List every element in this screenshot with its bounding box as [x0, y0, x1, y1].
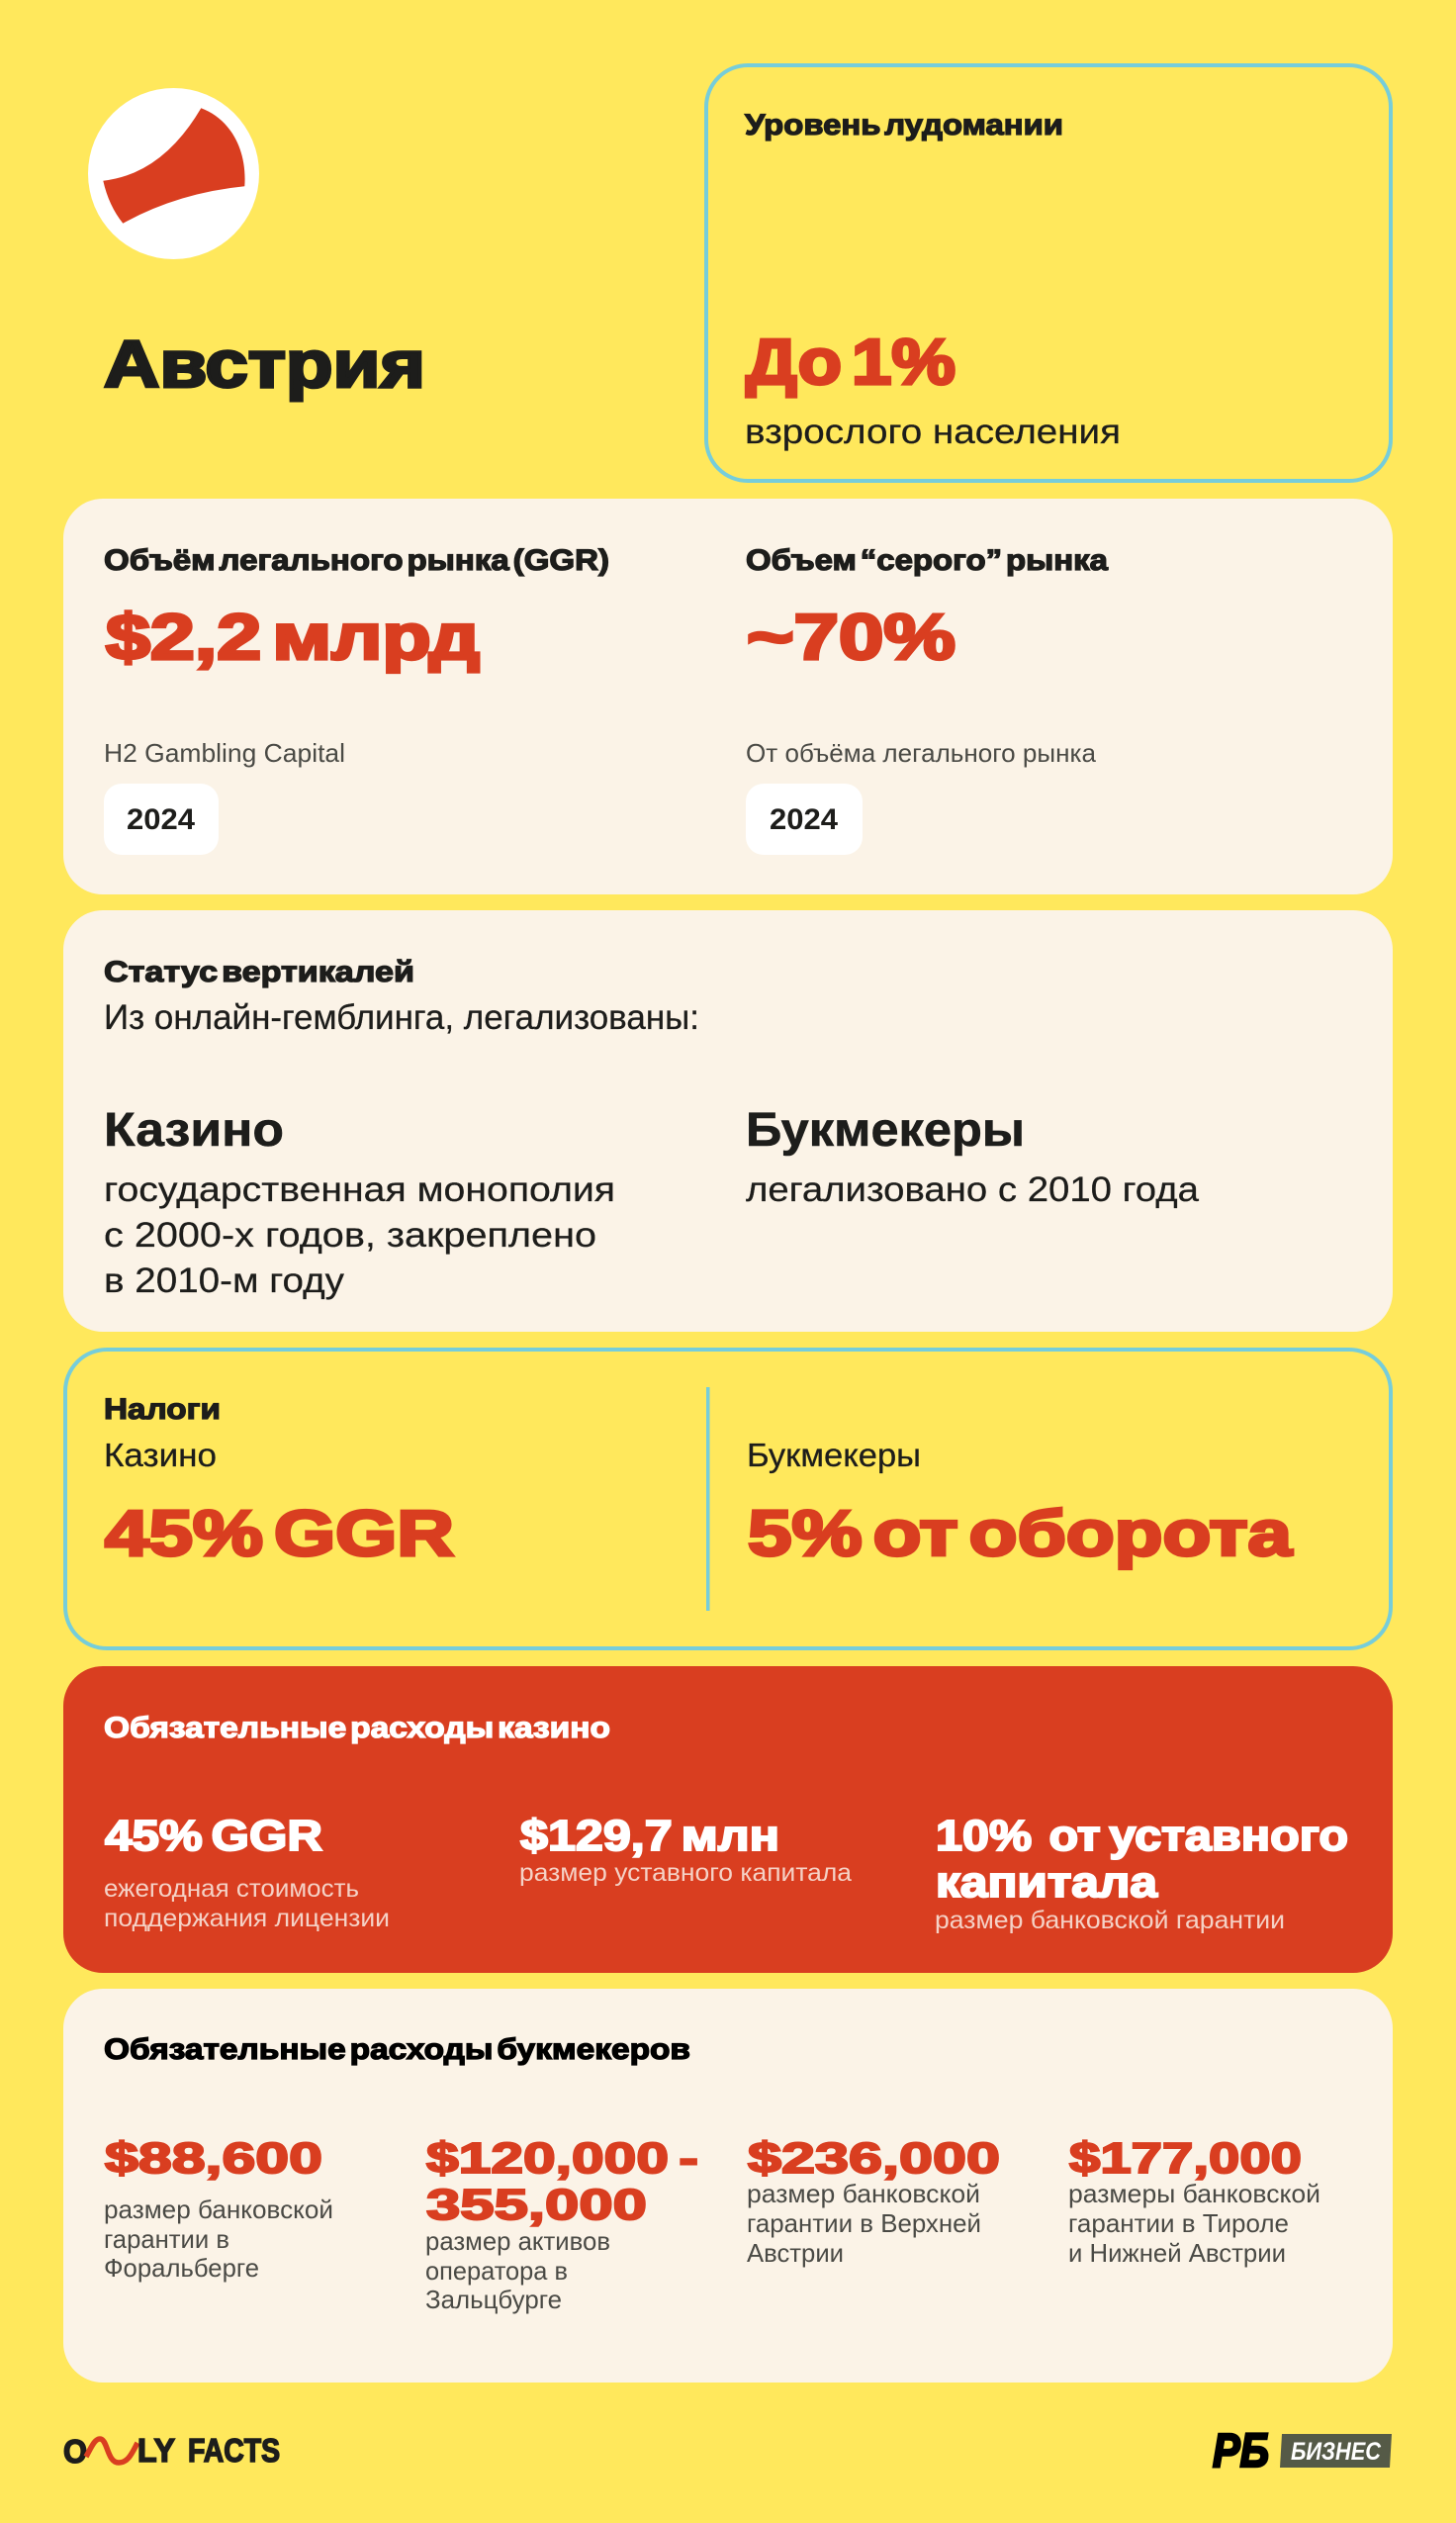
cost: license: поддержания лицензии: [104, 1905, 390, 1932]
cost: Vorarlberg: гарантии в: [104, 2224, 229, 2254]
panel: verticals status: [63, 910, 1393, 1332]
cost: capital: размер уставного капитала: [519, 1859, 852, 1887]
heading: grey market: Объем “серого” рынка: [746, 544, 1108, 577]
logo: Only Facts: FACTS: [188, 2432, 280, 2469]
cost: Upper Austria: [747, 2134, 1000, 2268]
casino description: с 2000-х годов, закреплено: [104, 1216, 596, 1255]
cost: Upper Austria: гарантии в Верхней: [747, 2208, 981, 2238]
casino title: Казино: [104, 1104, 284, 1157]
cost: license: 45% GGR: [105, 1812, 322, 1860]
cost: bank guarantee: капитала: [936, 1858, 1158, 1907]
cost: Vorarlberg: размер банковской: [104, 2195, 333, 2224]
caption: взрослого населения: [745, 413, 1121, 451]
bookmakers title: Букмекеры: [746, 1104, 1025, 1157]
icon: Austria map in circle: [88, 88, 259, 259]
cost: Vorarlberg: Форальберге: [104, 2253, 259, 2283]
cost: Upper Austria: $236,000: [748, 2134, 1000, 2183]
logo: Only Facts: O: [63, 2433, 87, 2470]
year pill left: [104, 784, 219, 855]
source note: H2 Gambling Capital: [104, 738, 345, 768]
cost: Salzburg: $120,000 -: [426, 2134, 698, 2183]
cost: Upper Austria: Австрии: [747, 2238, 844, 2268]
cost: Salzburg: размер активов: [425, 2226, 610, 2256]
heading: Обязательные расходы казино: [104, 1712, 610, 1744]
cost: Salzburg: 355,000: [426, 2181, 647, 2229]
heading: Налоги: [104, 1393, 221, 1426]
cost: capital: $129,7 млн: [520, 1812, 779, 1860]
grey market note: От объёма легального рынка: [746, 738, 1097, 768]
cost: Salzburg: [425, 2134, 698, 2314]
year pill right: 2024: [770, 803, 838, 836]
cost: Upper Austria: размер банковской: [747, 2179, 980, 2208]
title: Австрия: [104, 327, 425, 402]
cost: Vorarlberg: $88,600: [105, 2134, 322, 2183]
casino tax value: 45% GGR: [105, 1497, 454, 1569]
cost: Salzburg: Зальцбурге: [425, 2285, 562, 2314]
value: До 1%: [746, 326, 956, 398]
logo: RB Business: БИЗНЕС: [1291, 2438, 1382, 2466]
logo: Only Facts: LY: [137, 2432, 175, 2469]
cost: Salzburg: оператора в: [425, 2256, 568, 2286]
casino label: Казино: [104, 1437, 217, 1473]
heading: legal market: Объём легального рынка (GGR): [104, 544, 609, 577]
cost: Tyrol and Lower Austria: $177,000: [1069, 2134, 1302, 2183]
cost: Tyrol and Lower Austria: гарантии в Тироле: [1068, 2208, 1289, 2238]
cost: bank guarantee: 10% от уставного: [936, 1812, 1348, 1860]
logo: RB Business: РБ: [1213, 2425, 1269, 2477]
panel: taxes: [65, 1350, 1391, 1648]
heading: Статус вертикалей: [104, 956, 414, 988]
bookmakers tax value: 5% от оборота: [748, 1497, 1293, 1569]
heading: Уровень лудомании: [745, 109, 1063, 141]
heading: Обязательные расходы букмекеров: [104, 2033, 690, 2066]
panel: gambling addiction level: [706, 65, 1391, 481]
subheading: Из онлайн-гемблинга, легализованы:: [104, 998, 699, 1037]
cost: license: [104, 1812, 390, 1932]
cost: capital: [519, 1812, 852, 1887]
panel: casino mandatory costs: [63, 1666, 1393, 1973]
value: grey market: ~70%: [747, 601, 956, 673]
year pill right: [746, 784, 863, 855]
bookmakers description: легализовано с 2010 года: [746, 1170, 1200, 1209]
logo: RB Business: [1213, 2425, 1392, 2477]
header: country: [88, 88, 425, 402]
logo: Only Facts: [63, 2432, 280, 2470]
casino description: государственная монополия: [104, 1170, 615, 1209]
cost: Tyrol and Lower Austria: и Нижней Австрии: [1068, 2238, 1286, 2268]
cost: Tyrol and Lower Austria: размеры банковской: [1068, 2179, 1320, 2208]
cost: license: ежегодная стоимость: [104, 1875, 359, 1903]
year pill left: 2024: [127, 803, 195, 836]
cost: bank guarantee: размер банковской гарантии: [935, 1907, 1285, 1934]
cost: Tyrol and Lower Austria: [1068, 2134, 1320, 2268]
cost: Vorarlberg: [104, 2134, 333, 2283]
cost: bank guarantee: [935, 1812, 1348, 1934]
value: legal market: $2,2 млрд: [106, 601, 480, 673]
panel: market volume: [63, 499, 1393, 894]
panel: bookmaker mandatory costs: [63, 1989, 1393, 2383]
bookmakers label: Букмекеры: [747, 1437, 921, 1473]
casino description: [104, 1170, 615, 1300]
casino description: в 2010-м году: [104, 1262, 345, 1300]
